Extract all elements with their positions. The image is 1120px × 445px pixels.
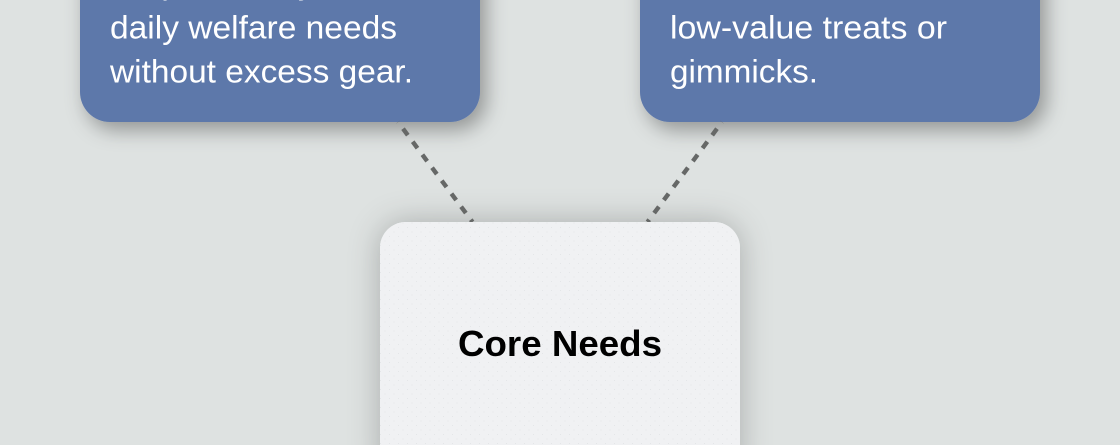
left card text: without excess gear. [109,54,413,90]
left card text: daily welfare needs [110,10,397,46]
right card text: low-value treats or [670,10,947,46]
panel: right card [640,0,1040,122]
panel: left card [80,0,480,122]
panel: core needs [380,122,740,445]
core needs label: Core Needs [458,323,662,364]
left card text [109,0,413,90]
right card text [670,10,947,90]
right card text: gimmicks. [670,54,818,90]
connector: left card to core needs [398,122,472,222]
connector: right card to core needs [648,122,722,222]
